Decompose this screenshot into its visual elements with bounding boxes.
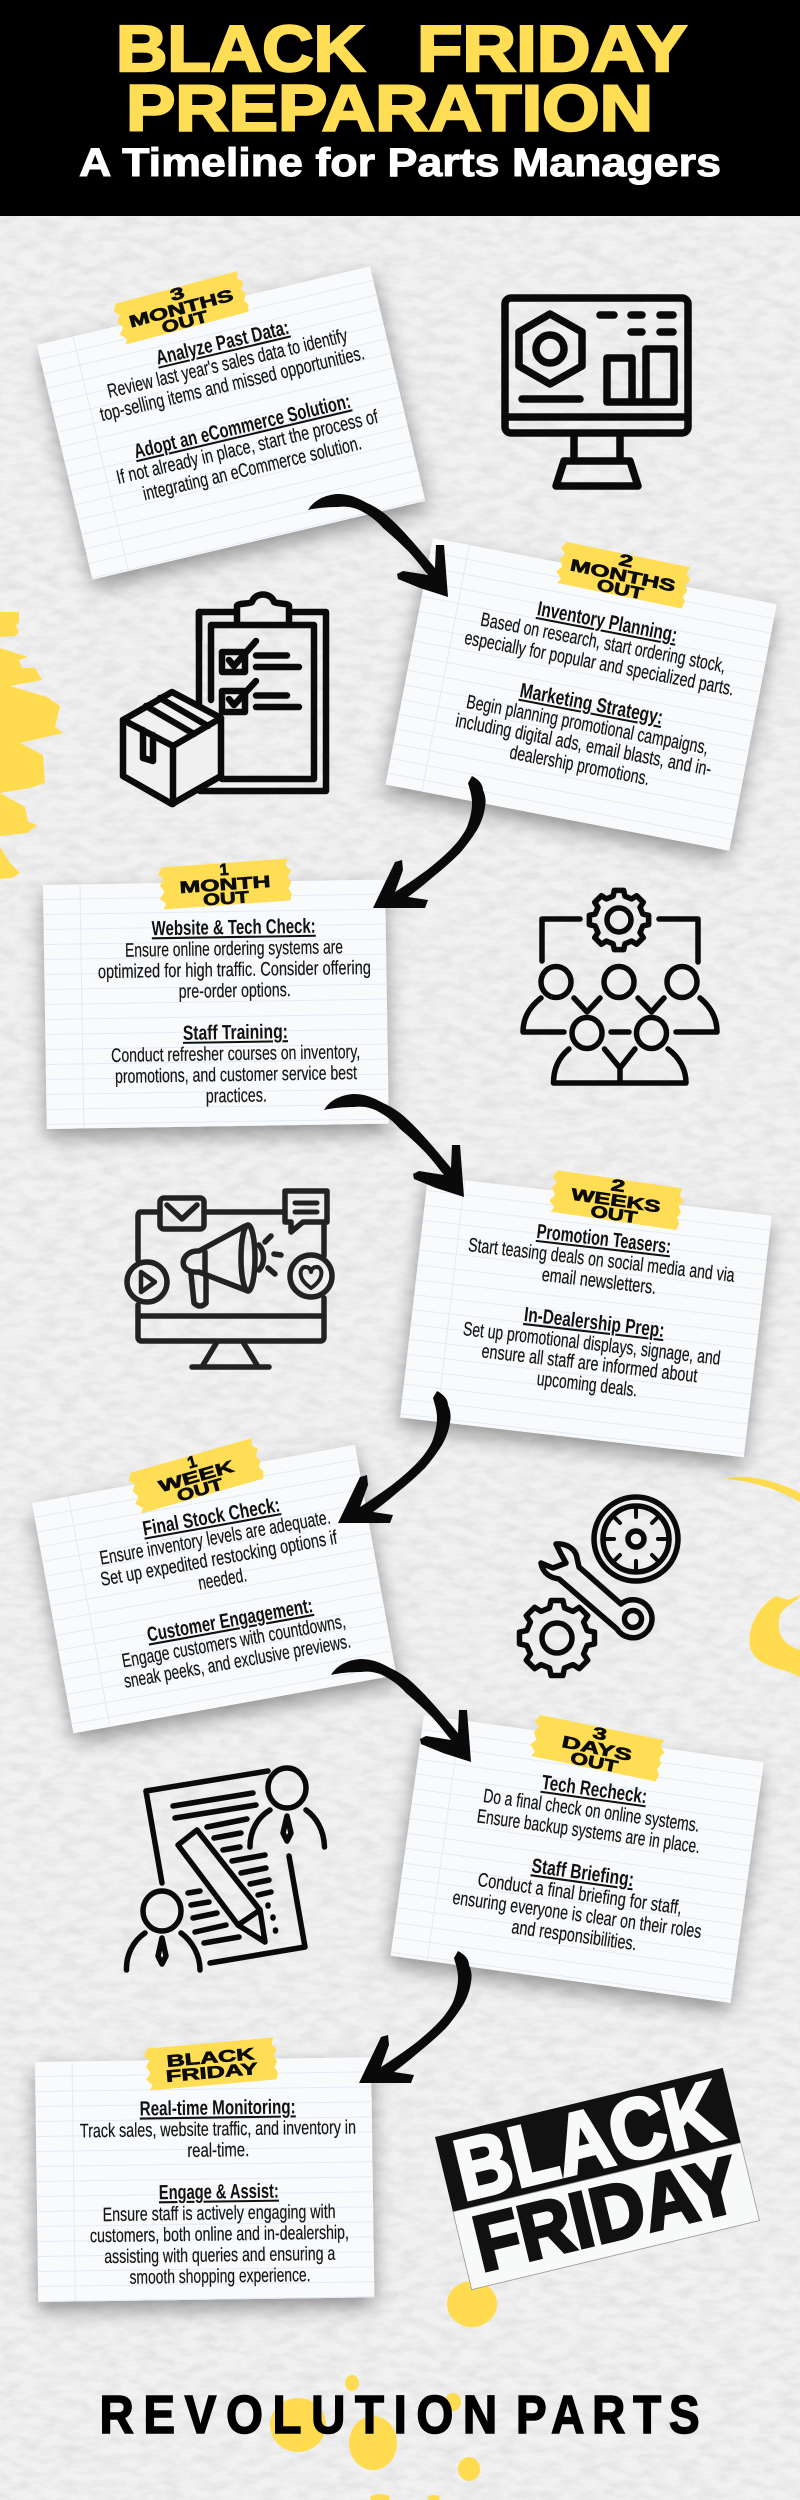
panel: black friday: customers, both online and in-dealership, (90, 2222, 349, 2247)
arrow: 1 week to 3 days (331, 1659, 471, 1762)
tag: 2 months out: MONTHS (569, 556, 677, 596)
panel: 1 week out: Final Stock Check: (141, 1493, 282, 1541)
panel: 3 months out: If not already in place, start the process of (114, 406, 381, 489)
panel: 2 weeks out: In-Dealership Prep: (523, 1303, 666, 1342)
panel: 1 week out: Ensure inventory levels are adequate. (98, 1507, 332, 1570)
panel: 3 months out: Analyze Past Data: (154, 316, 291, 370)
panel: black friday: Ensure staff is actively engaging with (102, 2201, 336, 2226)
arrow: 2 weeks to 1 week (338, 1391, 451, 1523)
arrow: 3 days to black friday (359, 1951, 472, 2083)
panel: 1 week out: Customer Engagement: (145, 1594, 315, 1647)
icon: clipboard with box (123, 594, 326, 804)
tag: 3 months out: 3 (168, 284, 186, 305)
title: PREPARATION (126, 72, 653, 144)
badge: black friday sticker (433, 2060, 760, 2292)
panel: black friday: assisting with queries and ensuring a (104, 2243, 335, 2268)
tag: 3 days out: OUT (569, 1749, 619, 1776)
panel: black friday: real-time. (187, 2139, 249, 2162)
panel: 2 weeks out (400, 1176, 772, 1457)
tag: 3 days out (528, 1712, 667, 1785)
title: BLACK (116, 12, 365, 85)
tag: 1 month out: OUT (202, 888, 250, 910)
panel: 1 month out: Ensure online ordering systems are (125, 936, 343, 962)
panel: 2 months out: including digital ads, email blasts, and in- (454, 710, 713, 781)
panel: 1 month out (43, 880, 389, 1129)
panel: 2 weeks out: upcoming deals. (536, 1368, 639, 1401)
arrow: 1 month to 2 weeks (324, 1094, 464, 1197)
panel: 3 days out: Conduct a final briefing for staff, (476, 1869, 683, 1919)
icon: document signing with two people (126, 1768, 324, 1970)
tag: 1 month out: 1 (219, 861, 229, 879)
panel: black friday: Engage & Assist: (159, 2180, 279, 2204)
badge: black friday sticker: BLACK (446, 2063, 730, 2219)
yellow paint drops bottom (270, 2281, 497, 2500)
panel: 2 months out: Inventory Planning: (535, 597, 679, 647)
panel: 2 weeks out: email newsletters. (541, 1264, 657, 1299)
panel: black friday (35, 2057, 374, 2302)
icon: monitor with nut and charts (505, 298, 688, 486)
panel: 3 days out: ensuring everyone is clear on their roles (451, 1887, 703, 1943)
panel: 3 months out (37, 266, 425, 580)
brand logo: PARTS (516, 2385, 700, 2445)
tag: 2 weeks out: WEEKS (570, 1186, 662, 1216)
panel: 3 days out: and responsibilities. (510, 1916, 638, 1955)
tag: black friday: BLACK (166, 2045, 255, 2071)
tag: 3 days out: 3 (591, 1724, 608, 1744)
panel: 3 months out: top-selling items and missed opportunities. (98, 342, 367, 426)
panel: 1 week out: Engage customers with countdowns, (120, 1611, 347, 1672)
panel: 1 month out: Staff Training: (183, 1020, 288, 1045)
tag: 3 months out: OUT (160, 308, 210, 337)
tag: 1 week out: WEEK (157, 1458, 236, 1496)
yellow paint splash right (724, 1477, 800, 1677)
tag: 2 weeks out (547, 1168, 686, 1233)
tag: 1 week out: OUT (175, 1475, 225, 1506)
title: FRIDAY (417, 12, 687, 85)
icon: team with gear (523, 890, 717, 1083)
panel: 2 weeks out: Promotion Teasers: (536, 1220, 672, 1258)
tag: 1 week out (126, 1435, 267, 1517)
tag: 2 weeks out: 2 (610, 1176, 626, 1196)
brand logo: REVOLUTION (100, 2384, 497, 2445)
panel: 1 month out: Conduct refresher courses on inventory, (111, 1041, 360, 1067)
tag: 1 month out (158, 856, 294, 913)
icon: wheel, wrench and gear (520, 1497, 678, 1676)
panel: 3 months out: integrating an eCommerce solution. (141, 432, 364, 505)
panel: 3 months out: Review last year's sales data to identify (105, 325, 350, 403)
tag: 3 months out: MONTHS (127, 286, 235, 332)
yellow paint brush splash left (0, 612, 63, 879)
tag: 2 months out: 2 (617, 551, 634, 572)
tag: 3 months out (111, 268, 252, 348)
panel: 3 days out: Do a final check on online systems. (482, 1785, 701, 1837)
panel: 1 month out: Website & Tech Check: (152, 915, 316, 940)
panel: 1 month out: pre-order options. (179, 979, 291, 1003)
panel: 1 week out (32, 1445, 396, 1733)
title (116, 12, 687, 144)
panel: 1 month out: practices. (206, 1085, 267, 1107)
panel: 3 months out: Adopt an eCommerce Solution: (132, 390, 353, 463)
subtitle: A Timeline for Parts Managers (79, 141, 721, 185)
icon: marketing monitor with megaphone (127, 1191, 332, 1367)
tag: 2 months out (554, 539, 693, 612)
tag: 2 weeks out: OUT (589, 1203, 638, 1227)
arrow: 3 months to 2 months (308, 494, 448, 597)
brand logo (100, 2384, 700, 2445)
panel: black friday: Real-time Monitoring: (140, 2095, 296, 2121)
arrow: 2 months to 1 month (373, 776, 486, 908)
tag: 2 months out: OUT (595, 576, 645, 603)
panel: 1 week out: Set up expedited restocking options if (99, 1527, 339, 1591)
panel: 1 week out: needed. (196, 1564, 249, 1595)
panel: 2 weeks out: ensure all staff are informed about (480, 1340, 699, 1387)
panel: black friday: Track sales, website traffic, and inventory in (80, 2117, 356, 2142)
tag: 3 days out: DAYS (560, 1733, 633, 1765)
panel: 1 week out: sneak peeks, and exclusive previews. (122, 1630, 352, 1693)
tag: 1 month out: MONTH (179, 873, 271, 897)
panel: 1 month out: optimized for high traffic. Consider offering (98, 957, 371, 983)
header banner (0, 0, 800, 216)
panel: 3 days out: Ensure backup systems are in place. (476, 1805, 701, 1858)
tag: black friday (143, 2037, 280, 2091)
panel: 2 months out: Marketing Strategy: (518, 679, 665, 729)
panel: 2 months out (386, 538, 777, 851)
tag: black friday: FRIDAY (165, 2060, 258, 2086)
panel: 2 months out: dealership promotions. (508, 742, 651, 790)
panel: 2 months out: Begin planning promotional campaigns, (465, 691, 710, 759)
panel: 3 days out: Staff Briefing: (530, 1854, 635, 1891)
panel: black friday: smooth shopping experience. (129, 2264, 311, 2289)
panel: 1 month out: promotions, and customer service best (115, 1062, 358, 1088)
tag: 1 week out: 1 (185, 1453, 199, 1472)
panel: 3 days out (391, 1715, 764, 2003)
panel: 3 days out: Tech Recheck: (540, 1771, 648, 1808)
badge: black friday sticker: FRIDAY (465, 2139, 747, 2288)
